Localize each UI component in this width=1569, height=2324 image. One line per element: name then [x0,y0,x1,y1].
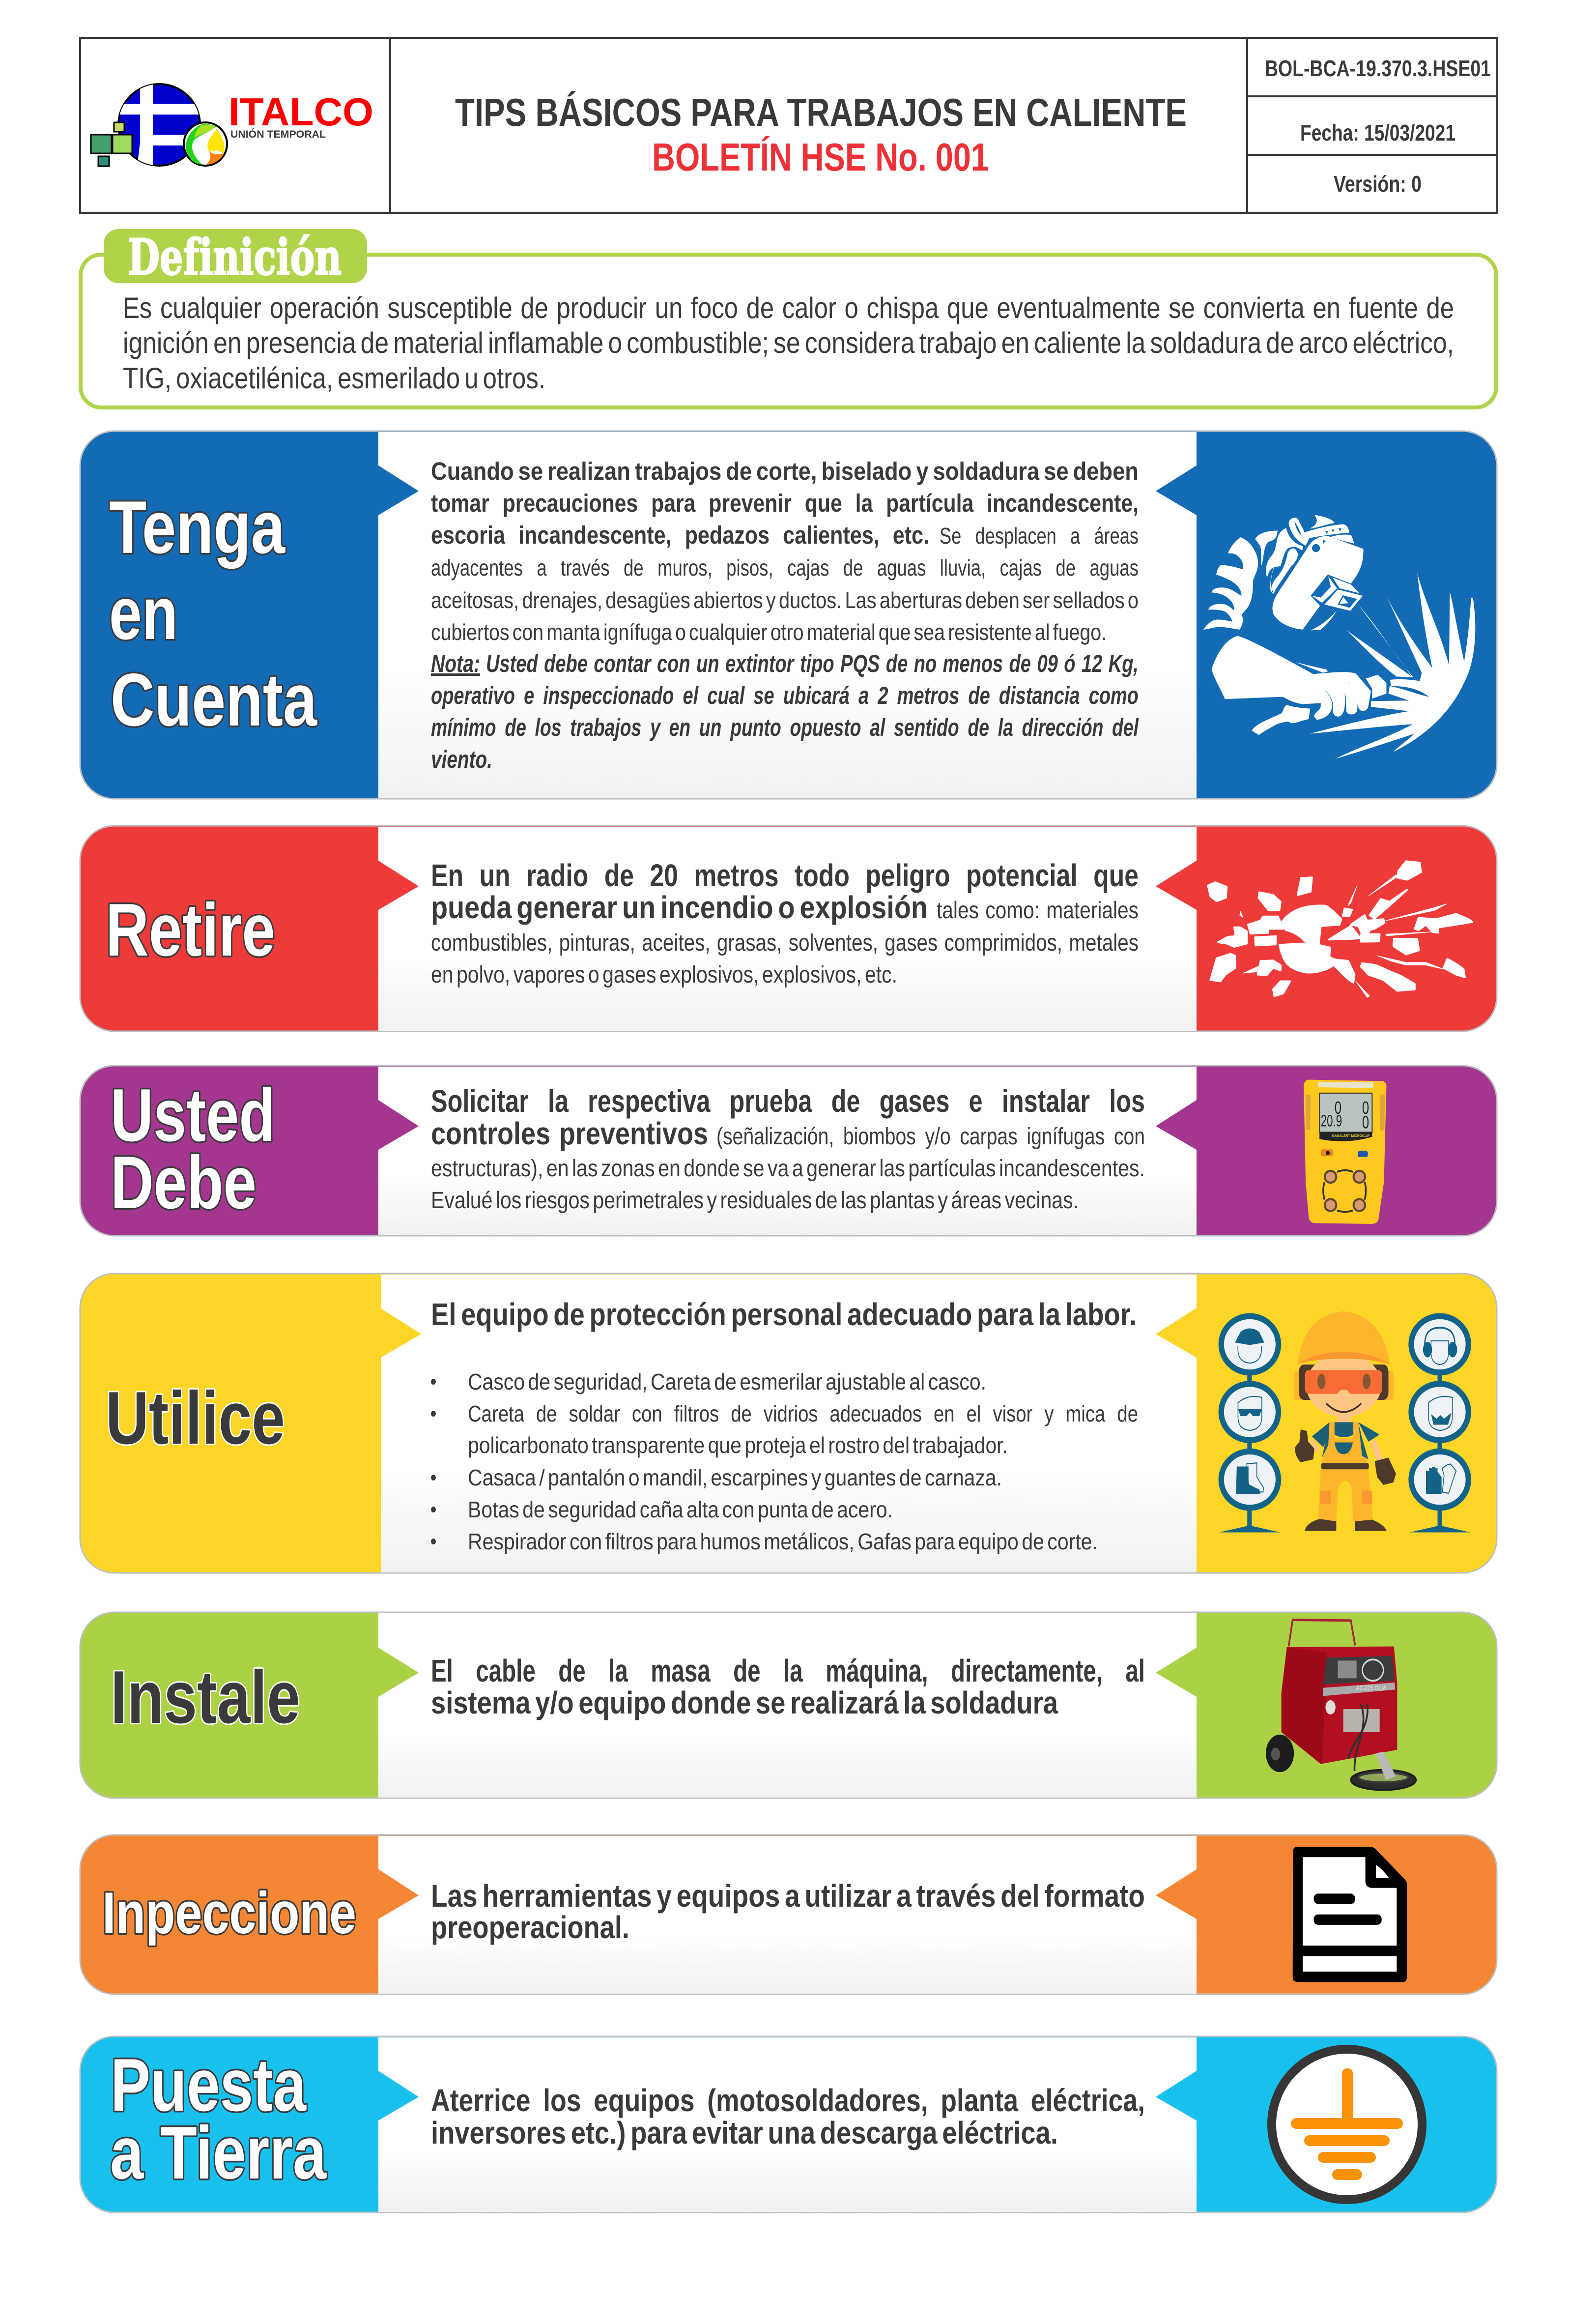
detector readings: 0 [1362,1112,1369,1133]
definition text: TIG, oxiacetilénica, esmerilado u otros. [123,362,545,395]
heading: Tenga en Cuenta [109,486,317,742]
panel background [80,1835,1497,1994]
panel: inspeccione [80,1835,1497,1994]
arrow right [378,1648,419,1697]
body text: Se desplacen a áreas [940,523,1139,549]
panel background [80,1066,1497,1236]
heading: Inpeccione: Inpeccione [102,1880,356,1946]
detector sensors [1323,1170,1366,1212]
right signs [1408,1313,1471,1532]
body text: combustibles, pinturas, aceites, grasas, solventes, gases comprimidos, metales [431,930,1139,956]
model strip [1323,1683,1395,1696]
icon: explosion [1208,861,1472,997]
arrow left [1156,465,1197,515]
machine body [1282,1646,1397,1764]
arrow right [378,2071,419,2121]
body text: Nota: [431,650,480,677]
panel centre [378,2037,1197,2212]
icon: welder [1203,515,1475,759]
body text: En un radio de 20 metros todo peligro potencial que [431,858,1139,893]
arrow right [378,1869,419,1919]
arrow left [1156,1308,1197,1358]
bullet list: Careta de soldar con filtros de vidrios adecuados en el visor y mica de [468,1401,1138,1426]
logo tagline: UNIÓN TEMPORAL [230,128,326,140]
body text [431,1653,1145,1720]
icon: gas detector [1304,1080,1386,1224]
machine cables [1348,1704,1416,1790]
panel centre [378,827,1197,1031]
body text: en polvo, vapores o gases explosivos, explosivos, etc. [431,962,897,988]
arrow left [1156,861,1197,910]
left signs [1219,1313,1281,1532]
body text: Usted debe contar con un extintor tipo PQS de no menos de 09 ó 12 Kg, [486,650,1139,677]
header [80,38,1497,213]
subtitle: BOLETÍN HSE No. 001 [652,135,989,179]
bullet list [431,1369,1138,1554]
body text: Aterrice los equipos (motosoldadores, planta eléctrica, [431,2083,1145,2118]
body text: estructuras), en las zonas en donde se va a generar las partículas incandescentes. [431,1156,1145,1182]
panel background [80,2036,1497,2212]
logo green swirl [184,122,227,166]
heading: Tenga en Cuenta: Cuenta [111,658,317,742]
body text: pueda generar un incendio o explosión [431,890,928,925]
heading: Puesta a Tierra [110,2043,327,2195]
body text [431,1083,1145,1214]
body text: aceitosas, drenajes, desagües abiertos y ductos. Las aberturas deben ser sellados o [431,587,1139,613]
body text: mínimo de los trabajos y en un punto opuesto al sentido de la dirección del [431,714,1139,741]
panel centre [378,1836,1197,1994]
panel: usted debe [80,1066,1497,1236]
body text: operativo e inspeccionado el cual se ubicará a 2 metros de distancia como [431,682,1139,709]
body text: Las herramientas y equipos a utilizar a través del formato [431,1878,1145,1914]
arrow right [378,465,419,515]
heading: Puesta a Tierra: Puesta [111,2043,307,2127]
heading: Retire: Retire [106,888,275,972]
definition tab [104,229,367,283]
detector body [1304,1080,1386,1224]
equipment lead text: El equipo de protección personal adecuado para la labor. [431,1297,1137,1332]
panel background [80,1274,1497,1573]
panel: puesta a tierra [80,2036,1497,2212]
control panel [1323,1656,1395,1685]
panel: utilice [80,1274,1497,1573]
panel: definición [81,228,1496,407]
body text: Cuando se realizan trabajos de corte, biselado y soldadura se deben [431,457,1139,485]
heading: Usted Debe: Debe [111,1141,257,1224]
body text: Solicitar la respectiva prueba de gases e instalar los [431,1083,1145,1119]
logo small squares [91,122,132,166]
icon: document [1293,1847,1407,1982]
panel background [80,431,1497,799]
body text: Evalué los riesgos perimetrales y residuales de las plantas y áreas vecinas. [431,1188,1079,1214]
body text [431,2083,1145,2150]
detector readings: 0 [1335,1098,1341,1118]
arrow left [1156,1869,1197,1919]
heading: Instale: Instale [111,1656,300,1739]
heading: Usted Debe: Usted [111,1074,275,1157]
heading: Utilice: Utilice [106,1376,285,1460]
detector readings: 0 [1362,1098,1369,1118]
panel centre [381,1275,1197,1572]
bullet list: Botas de seguridad caña alta con punta de acero. [468,1497,893,1522]
body text [431,1878,1145,1945]
detector buttons [1321,1149,1368,1157]
detector screen [1319,1093,1372,1133]
panel centre [378,1067,1197,1235]
bullet list: Casaca / pantalón o mandil, escarpines y guantes de carnaza. [468,1465,1002,1490]
definition text [123,291,1454,395]
model label: AC-225 GLM [1356,1684,1386,1692]
logo blue globe [118,84,201,167]
definition frame [81,255,1496,407]
heading: Usted Debe [111,1074,275,1224]
document code: BOL-BCA-19.370.3.HSE01 [1265,56,1491,81]
body text: controles preventivos [431,1116,708,1151]
body text: tomar precauciones para prevenir que la partícula incandescente, [431,489,1139,517]
icon: welding machine [1266,1620,1416,1790]
header frame [80,38,1497,213]
worker [1294,1311,1396,1531]
body text [431,858,1139,988]
body text: inversores etc.) para evitar una descarga eléctrica. [431,2115,1058,2150]
panel: tenga en cuenta [80,431,1497,799]
detector top window [1318,1082,1373,1088]
body text: (señalización, biombos y/o carpas ignífugas con [716,1124,1145,1150]
detector readings [1321,1098,1369,1133]
front connectors [1343,1709,1380,1732]
body text: viento. [431,746,492,773]
body text: El cable de la masa de la máquina, directamente, al [431,1653,1145,1688]
heading: Tenga en Cuenta: Tenga [109,486,285,569]
arrow left [1156,2071,1197,2121]
machine handle [1288,1620,1355,1646]
bullet list: Respirador con filtros para humos metálicos, Gafas para equipo de corte. [468,1529,1098,1554]
panel centre [378,432,1197,798]
body text [431,457,1139,773]
logo: ITALCO [91,84,373,167]
panel: instale [80,1612,1497,1798]
arrow right [378,861,419,910]
detector brand: GASALERT MICROCLIP [1332,1133,1369,1138]
heading: Puesta a Tierra: a Tierra [110,2111,327,2195]
icon: ground symbol [1272,2049,1422,2200]
panel background [80,826,1497,1031]
panel centre [378,1613,1197,1798]
version: Versión: 0 [1334,171,1422,197]
body text: preoperacional. [431,1910,629,1945]
arrow left [1156,1648,1197,1697]
bullet list: Casco de seguridad, Careta de esmerilar ajustable al casco. [468,1369,986,1394]
definition heading: Definición [128,228,342,286]
arrow right [378,1100,419,1150]
logo name: ITALCO [228,90,373,134]
body text: adyacentes a través de muros, pisos, cajas de aguas lluvia, cajas de aguas [431,555,1139,581]
detector label strip [1319,1133,1372,1141]
body text: cubiertos con manta ignífuga o cualquier otro material que sea resistente al fuego. [431,619,1107,645]
panel: retire [80,826,1497,1031]
date: Fecha: 15/03/2021 [1300,120,1455,145]
welding clamp [1375,1751,1396,1780]
title: TIPS BÁSICOS PARA TRABAJOS EN CALIENTE [455,90,1187,134]
bullet list: policarbonato transparente que proteja el rostro del trabajador. [468,1432,1008,1458]
icon: PPE signs and worker [1219,1311,1471,1532]
machine wheel [1266,1735,1294,1772]
body text: tales como: materiales [937,898,1139,924]
body text: escoria incandescente, pedazos calientes, etc. [431,521,929,549]
arrow right [381,1308,421,1358]
panel background [80,1612,1497,1798]
body text: sistema y/o equipo donde se realizará la soldadura [431,1685,1058,1720]
heading: Tenga en Cuenta: en [109,572,178,655]
detector readings: 20.9 [1321,1111,1342,1130]
arrow left [1156,1100,1197,1150]
